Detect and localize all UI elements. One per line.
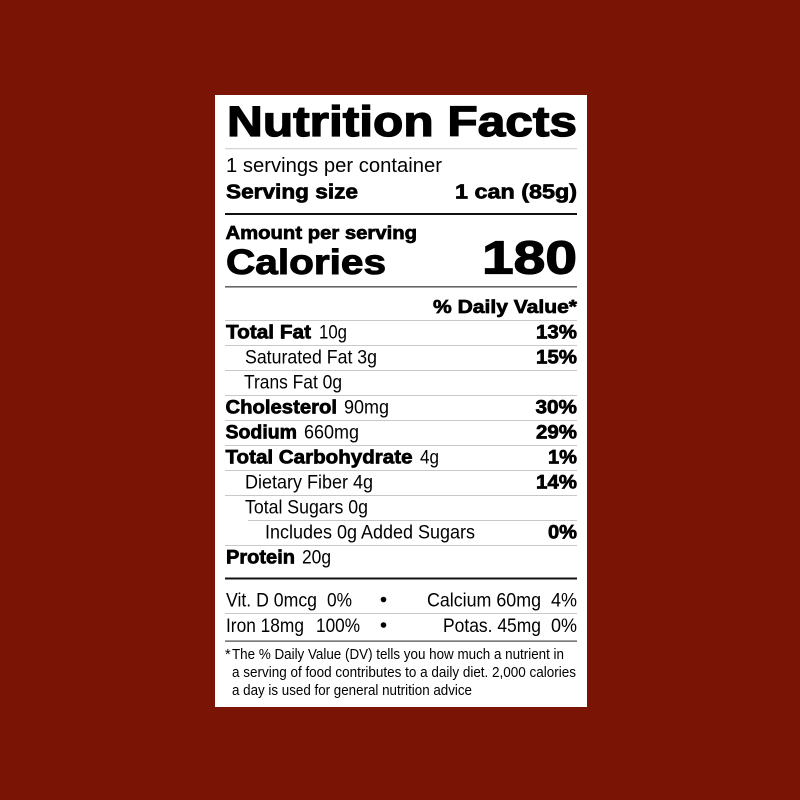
micronutrients: vitamin d and calcium: 0% (327, 590, 352, 612)
calories label: Calories (226, 243, 386, 282)
row: trans fat: Trans Fat 0g (244, 372, 342, 394)
row: protein: Protein (226, 546, 295, 568)
footnote (225, 647, 576, 699)
row: dietary fiber: 14% (536, 472, 577, 494)
footnote: The % Daily Value (DV) tells you how much a nutrient in (232, 647, 564, 663)
row: total fat: Total Fat (226, 322, 312, 344)
row: sodium: Sodium (226, 422, 297, 444)
footnote: * (225, 647, 231, 663)
row: saturated fat: 15% (536, 346, 577, 368)
row: total carbohydrate: 1% (548, 446, 577, 468)
footnote: a day is used for general nutrition advice (232, 683, 472, 699)
row: total carbohydrate: Total Carbohydrate (226, 446, 413, 468)
footnote: a serving of food contributes to a daily diet. 2,000 calories (232, 665, 576, 681)
micronutrients: vitamin d and calcium: 4% (551, 590, 577, 612)
row: total fat: 13% (536, 322, 577, 344)
micronutrients: vitamin d and calcium: Vit. D 0mcg (226, 590, 317, 612)
row: sodium: 29% (536, 422, 577, 444)
row: cholesterol: 30% (536, 396, 577, 418)
row: cholesterol: Cholesterol (226, 396, 337, 418)
row: saturated fat: Saturated Fat 3g (245, 346, 377, 368)
row: total fat (226, 322, 577, 344)
micronutrients: iron and potassium: Iron 18mg (226, 615, 304, 637)
daily value header: % Daily Value* (433, 296, 578, 317)
row: saturated fat (245, 346, 577, 368)
serving size: 1 can (85g) (455, 180, 577, 204)
row: sodium (226, 422, 577, 444)
row: total fat: 10g (319, 322, 347, 344)
row: total carbohydrate: 4g (420, 446, 439, 468)
row: protein (226, 546, 331, 568)
row: dietary fiber: Dietary Fiber 4g (245, 472, 373, 494)
serving size (226, 180, 577, 204)
micronutrients: iron and potassium: 100% (316, 615, 360, 637)
title: Nutrition Facts (227, 99, 577, 146)
row: total carbohydrate (226, 446, 577, 468)
micronutrients: iron and potassium: 0% (551, 615, 577, 637)
micronutrients: iron and potassium (226, 615, 577, 637)
micronutrients: iron and potassium: Potas. 45mg (443, 615, 541, 637)
calories value: 180 (482, 232, 577, 284)
panel: nutrition label (215, 95, 587, 707)
micronutrients: vitamin d and calcium: Calcium 60mg (427, 590, 541, 612)
row: sodium: 660mg (304, 422, 359, 444)
amount per serving: Amount per serving (226, 222, 417, 243)
micronutrients: vitamin d and calcium (226, 590, 577, 612)
row: total sugars: Total Sugars 0g (245, 496, 368, 518)
row: added sugars: 0% (548, 522, 577, 544)
serving size: Serving size (226, 180, 358, 204)
row: cholesterol: 90mg (344, 396, 389, 418)
row: protein: 20g (302, 546, 331, 568)
row: cholesterol (226, 396, 577, 418)
servings per container: 1 servings per container (226, 154, 442, 177)
row: dietary fiber (245, 472, 577, 494)
row: added sugars: Includes 0g Added Sugars (265, 522, 475, 544)
